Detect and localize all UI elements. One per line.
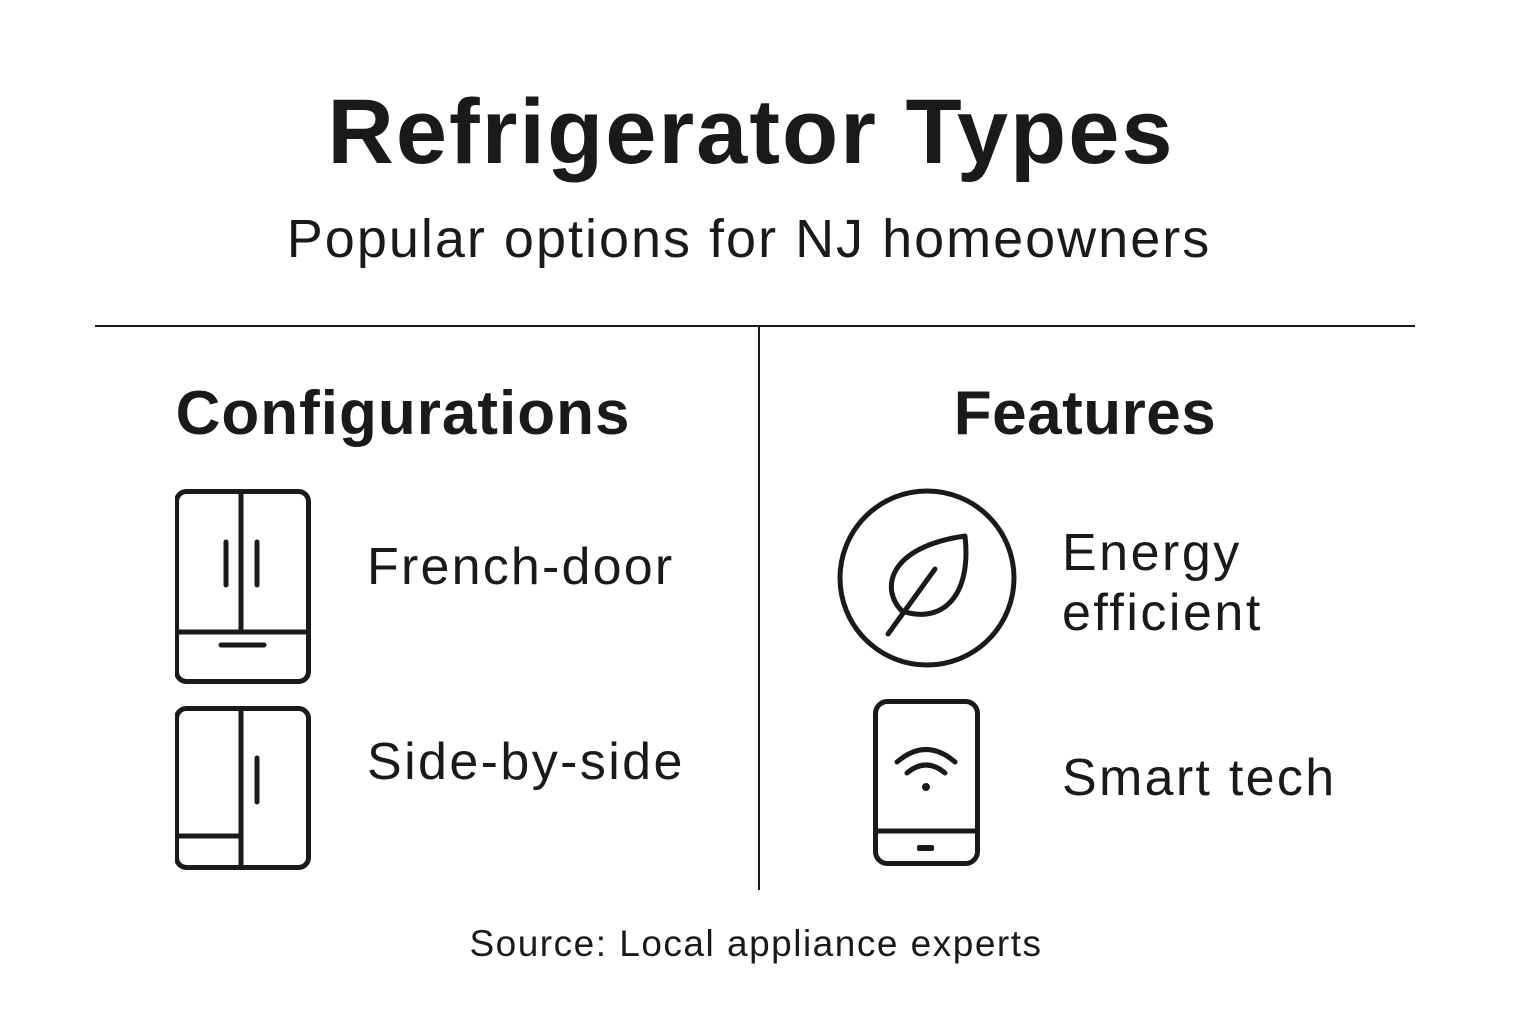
label: energy efficient (1062, 524, 1263, 642)
label: smart tech: Smart tech (1062, 749, 1336, 807)
label: side-by-side: Side-by-side (367, 733, 685, 791)
title: Refrigerator Types (327, 81, 1175, 183)
source note: Source: Local appliance experts (469, 923, 1043, 964)
heading: features: Features (954, 379, 1216, 448)
panel: configurations (175, 379, 685, 870)
label: energy efficient: Energy (1062, 524, 1242, 582)
icon: side-by-side fridge (175, 706, 311, 870)
heading: configurations: Configurations (176, 379, 630, 448)
icon: smartphone with wifi (873, 699, 980, 866)
panel: features (838, 379, 1336, 866)
subtitle: Popular options for NJ homeowners (287, 209, 1211, 269)
icon: french-door fridge (175, 489, 311, 684)
label: french-door: French-door (367, 538, 674, 596)
icon: leaf in circle (838, 488, 1016, 668)
label: energy efficient: efficient (1062, 584, 1263, 642)
